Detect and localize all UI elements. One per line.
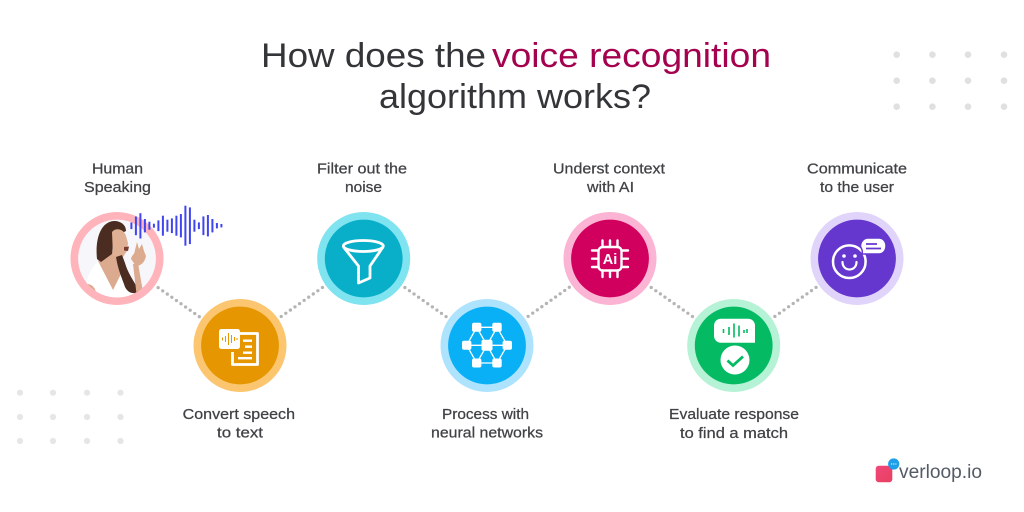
logo: verloop.io [876, 458, 982, 483]
label: filter out the noise: noise [345, 180, 382, 196]
label: convert speech to text: to text [217, 426, 263, 442]
step 6: evaluate response to find a match [669, 303, 799, 442]
icon: smiley with speech bubble [814, 216, 900, 301]
step 5: understand context with AI [553, 162, 665, 301]
title: algorithm works? [379, 78, 651, 116]
icon: funnel [321, 216, 406, 301]
step 1: human speaking [74, 162, 222, 301]
label: filter out the noise [317, 162, 407, 196]
label: understand context with AI: Underst context [553, 162, 665, 178]
step 3: filter out the noise [317, 162, 407, 301]
label: evaluate response to find a match [669, 407, 799, 442]
dot pattern: bottom left [17, 390, 124, 444]
label: communicate to the user [807, 162, 907, 196]
dotted connector path [117, 258, 857, 346]
title: voice recognition [492, 37, 771, 75]
label: convert speech to text: Convert speech [183, 407, 295, 423]
icon: photo of woman speaking [74, 216, 160, 301]
icon: voice bubble with check mark [691, 303, 776, 388]
label: evaluate response to find a match: Evaluate response [669, 407, 799, 423]
label: process with neural networks [431, 407, 543, 442]
step 2: convert speech to text [183, 303, 295, 442]
label: convert speech to text [183, 407, 295, 442]
step 7: communicate to the user [807, 162, 907, 301]
label: process with neural networks: Process with [442, 407, 529, 423]
icon: speech to text document [197, 303, 283, 388]
icon: neural network [444, 303, 530, 388]
title: How does the [261, 37, 486, 75]
icon: sound wave [130, 206, 222, 246]
label: process with neural networks: neural networks [431, 426, 543, 442]
label: understand context with AI [553, 162, 665, 196]
title [261, 37, 771, 116]
dot pattern: top right [893, 51, 1007, 110]
icon: AI chip: Ai [603, 252, 617, 268]
label: understand context with AI: with AI [586, 180, 634, 196]
label: human speaking [84, 162, 151, 196]
label: communicate to the user: Communicate [807, 162, 907, 178]
label: human speaking: Human [92, 162, 143, 178]
label: communicate to the user: to the user [820, 180, 894, 196]
label: human speaking: Speaking [84, 180, 151, 196]
step 4: process with neural networks [431, 303, 543, 442]
label: filter out the noise: Filter out the [317, 162, 407, 178]
logo: verloop.io: verloop.io [899, 462, 982, 483]
label: evaluate response to find a match: to find a match [680, 426, 788, 442]
